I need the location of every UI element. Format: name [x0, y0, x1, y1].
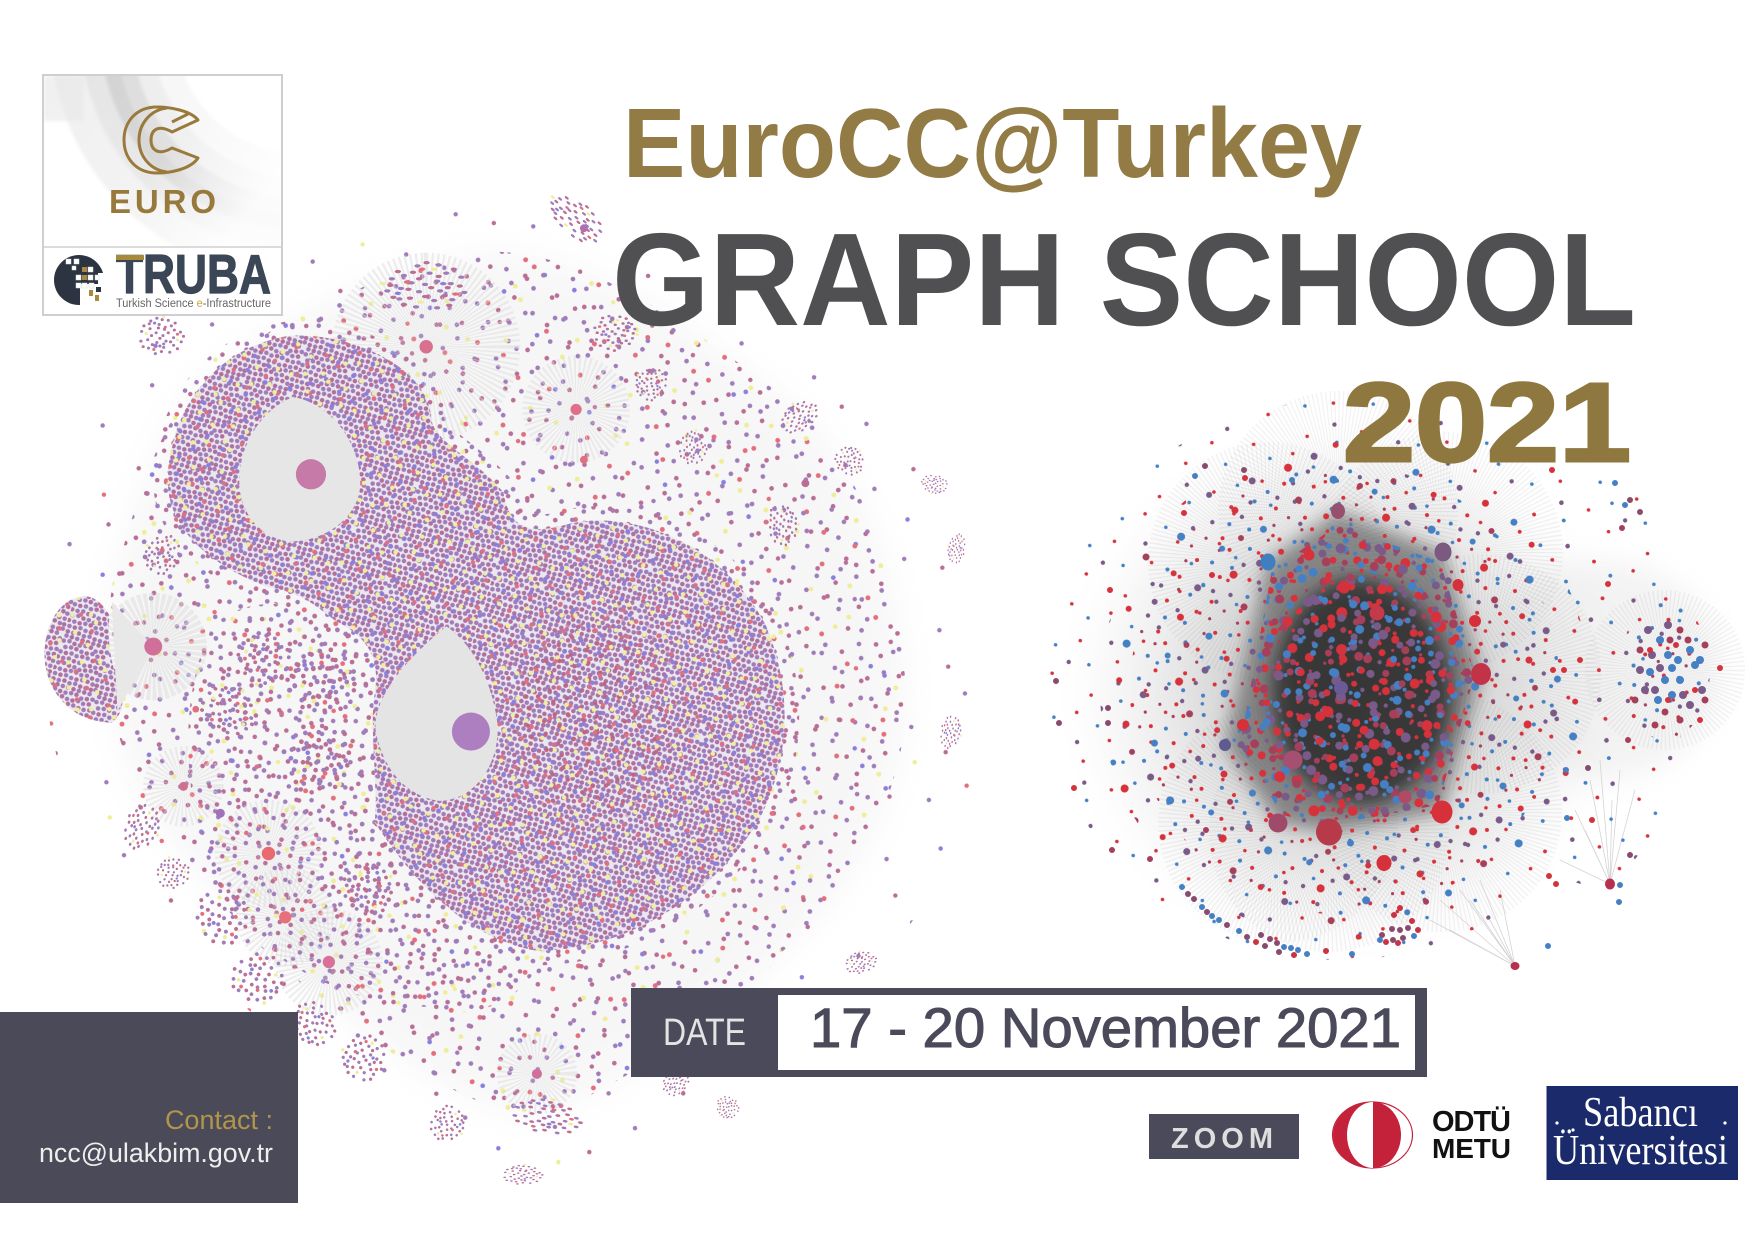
larger scattered nodes [1100, 440, 1590, 940]
swoosh background [44, 76, 246, 230]
star of hub connections [1225, 511, 1481, 832]
grey edge void around upper hub [239, 397, 360, 541]
sparse inner nodes [108, 252, 906, 1119]
sparse nodes [1045, 400, 1635, 960]
title: EuroCC@Turkey: EuroCC@Turkey [623, 88, 1362, 198]
logo: METU [1332, 1102, 1511, 1168]
edge halo toward side cluster [1480, 560, 1720, 780]
grey edge void around lower hub [375, 626, 498, 801]
hand placed outer nodes [1056, 466, 1640, 946]
third layer of core nodes [1240, 525, 1475, 825]
sparse outer nodes [43, 207, 984, 1175]
peripheral node clusters [120, 186, 967, 1184]
contact label: Contact : [165, 1105, 273, 1135]
title: GRAPH SCHOOL: GRAPH SCHOOL [612, 206, 1636, 353]
panel divider [44, 246, 281, 248]
title: 2021: 2021 [1343, 360, 1631, 485]
core nodes [1240, 525, 1475, 825]
hub edge fans [126, 300, 603, 1094]
second layer of sparse nodes [108, 252, 906, 1119]
halo of edges [1055, 415, 1635, 965]
main dense community [168, 335, 785, 951]
logo panel: EuroCC and TRUBA [42, 74, 283, 316]
ODTÜ METU wordmark: ODTÜ [1432, 1105, 1511, 1138]
bottom arc nodes [1182, 887, 1418, 955]
left blob fan void [112, 602, 153, 711]
TRUBA gold band [116, 255, 144, 260]
badge: ZOOM: ZOOM [1171, 1123, 1273, 1155]
METU emblem [1332, 1102, 1412, 1168]
EURO wordmark: EURO [109, 183, 216, 220]
logo: Sabancı Üniversitesi: Üniversitesi [1553, 1128, 1728, 1174]
contact email: ncc@ulakbim.gov.tr [39, 1138, 273, 1168]
date value: 17 - 20 November 2021 [810, 996, 1401, 1059]
semi-dense lower-left region [188, 604, 537, 1013]
left network graph [43, 186, 984, 1184]
side cluster nodes [1620, 600, 1720, 740]
date banner [631, 988, 1427, 1077]
TRUBA tagline: Turkish Science e-Infrastructure [116, 298, 271, 310]
left dense blob [45, 596, 123, 723]
sparse nodes toward side cluster [1495, 455, 1685, 885]
logo: METU: METU [1432, 1133, 1511, 1164]
TRUBA globe icon [54, 255, 106, 308]
TRUBA wordmark: TRUBA [116, 243, 271, 305]
badge: ZOOM [1149, 1114, 1299, 1159]
logo: Sabancı Üniversitesi: Sabancı [1583, 1090, 1698, 1136]
panel: contact [0, 1012, 298, 1203]
second layer of core nodes [1240, 525, 1475, 825]
large hub nodes [1219, 503, 1615, 970]
logo: Sabancı Üniversitesi [1546, 1086, 1738, 1180]
date label: DATE [663, 1012, 746, 1054]
EuroCC C mark [124, 107, 198, 173]
mid nodes [1130, 465, 1560, 915]
hub edge spokes [1208, 451, 1705, 892]
right network graph [1045, 400, 1720, 970]
hub nodes [144, 224, 809, 1079]
web of faint edges [108, 252, 906, 1119]
dark core [1272, 579, 1452, 805]
edges of the lower right peripheral hubs [1430, 760, 1635, 966]
